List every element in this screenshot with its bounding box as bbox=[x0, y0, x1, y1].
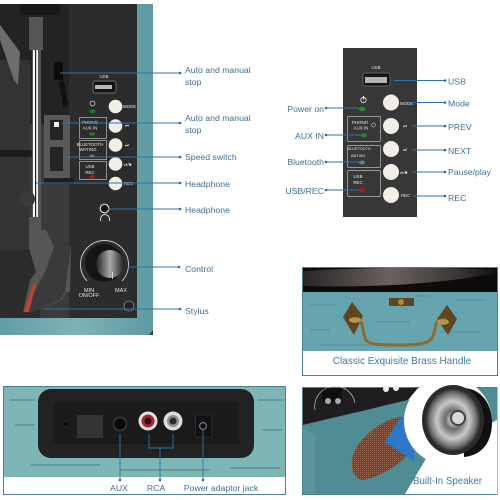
callout: Bluetooth: Bluetooth bbox=[287, 157, 324, 167]
buttons bbox=[383, 94, 413, 203]
callout: auto and manual stop 2 bbox=[62, 113, 251, 135]
callout: auto and manual stop 1: stop bbox=[185, 77, 202, 87]
AUX jack bbox=[114, 418, 126, 430]
buttons: REC bbox=[401, 193, 410, 198]
Bluetooth box: BLUETOOTH bbox=[347, 147, 371, 151]
USB/REC box: REC bbox=[353, 180, 363, 185]
power indicator bbox=[90, 101, 96, 114]
mode boxes bbox=[77, 118, 106, 180]
buttons: ⏭ bbox=[403, 147, 407, 152]
PHONO / AUX IN box: PHONO bbox=[352, 120, 369, 125]
panel: button panel diagram bbox=[343, 48, 417, 217]
USB port: USB bbox=[371, 65, 381, 70]
callout: power on: Power on bbox=[287, 104, 324, 114]
power icon and LED bbox=[358, 96, 366, 111]
buttons: ⏮ bbox=[403, 124, 407, 129]
buttons: ⏯/■ bbox=[400, 170, 408, 175]
callout: RCA bbox=[147, 434, 173, 493]
volume knob: MAX bbox=[115, 288, 127, 294]
control buttons: ⏮ bbox=[125, 124, 129, 128]
callout: speed switch: Speed switch bbox=[185, 152, 237, 162]
callout: RCA: RCA bbox=[147, 483, 165, 493]
callout: REC bbox=[412, 193, 466, 203]
callout: Pause/play bbox=[412, 167, 492, 177]
mode boxes: AUX IN bbox=[83, 126, 97, 130]
knobs bbox=[322, 388, 342, 402]
mode boxes: BLUETOOTH bbox=[77, 142, 103, 147]
vinyl record bbox=[303, 268, 497, 292]
callout: Mode bbox=[410, 98, 470, 108]
RCA red bbox=[138, 412, 158, 430]
control buttons: REC bbox=[124, 181, 133, 186]
callout: PREV bbox=[412, 122, 472, 132]
callout: REC: REC bbox=[448, 193, 466, 203]
callout: USB bbox=[394, 76, 466, 86]
callout: auto and manual stop 2: stop bbox=[185, 125, 202, 135]
mode boxes: PHONO bbox=[82, 120, 99, 125]
caption: Built-In Speaker bbox=[413, 476, 483, 487]
control buttons: ⏯/■ bbox=[124, 162, 132, 167]
callout: Pause/play: Pause/play bbox=[448, 167, 492, 177]
USB/REC box bbox=[348, 170, 380, 196]
RCA white bbox=[164, 412, 182, 430]
mode boxes: USB bbox=[85, 164, 95, 169]
callout: auto and manual stop 1: Auto and manual bbox=[185, 65, 251, 75]
cartridge bbox=[23, 230, 71, 312]
left face of case bbox=[303, 425, 315, 494]
volume knob: ON/OFF bbox=[79, 293, 100, 299]
stop lever bbox=[54, 62, 63, 80]
USB port bbox=[93, 74, 116, 93]
caption: Classic Exquisite Brass Handle bbox=[333, 356, 472, 367]
case top bbox=[303, 388, 418, 425]
callout: Bluetooth bbox=[287, 157, 359, 167]
speed switch plate bbox=[44, 115, 70, 178]
callout: AUX IN bbox=[295, 131, 361, 141]
callout: auto and manual stop 2: Auto and manual bbox=[185, 113, 251, 123]
callout: NEXT: NEXT bbox=[448, 146, 472, 156]
callout: USB/REC: USB/REC bbox=[285, 186, 324, 196]
magnified speaker circle bbox=[404, 377, 492, 465]
Bluetooth box bbox=[347, 146, 380, 168]
callout: headphone 1: Headphone bbox=[185, 179, 230, 189]
tonearm bbox=[32, 50, 41, 240]
callout: power on bbox=[287, 104, 359, 114]
callout: control bbox=[128, 264, 213, 274]
control buttons bbox=[109, 100, 136, 190]
PHONO / AUX IN box bbox=[348, 116, 380, 142]
callout: AUX: AUX bbox=[110, 483, 128, 493]
callout: AUX bbox=[110, 434, 128, 493]
USB port bbox=[363, 65, 390, 86]
panel: rear ports bbox=[4, 386, 286, 494]
callout: USB: USB bbox=[448, 76, 466, 86]
callout: auto and manual stop 1 bbox=[60, 65, 251, 87]
teal case edge bbox=[0, 4, 153, 335]
callout: power adaptor jack bbox=[184, 430, 259, 493]
callout: PREV: PREV bbox=[448, 122, 472, 132]
panel: built-in speaker bbox=[302, 377, 500, 495]
callout: power adaptor jack: Power adaptor jack bbox=[184, 483, 259, 493]
panel: turntable control close-up bbox=[0, 4, 153, 335]
control buttons: ⏭ bbox=[125, 142, 129, 148]
callout: Mode: Mode bbox=[448, 98, 470, 108]
callout: stylus: Stylus bbox=[185, 306, 209, 316]
panel: brass handle bbox=[302, 268, 498, 376]
PHONO / AUX IN box: AUX IN bbox=[354, 126, 368, 130]
callout: control: Control bbox=[185, 264, 213, 274]
control buttons: MODE bbox=[123, 104, 136, 109]
screw bbox=[124, 301, 134, 311]
brass handle bbox=[343, 298, 457, 345]
headphone jack bbox=[100, 204, 110, 221]
callout: headphone 2 bbox=[108, 205, 230, 215]
callout: AUX IN: AUX IN bbox=[295, 131, 324, 141]
case body bbox=[303, 388, 497, 494]
black port plate bbox=[38, 389, 254, 458]
mode boxes: REC bbox=[85, 170, 95, 175]
volume knob bbox=[79, 241, 128, 299]
mode boxes: WATING bbox=[79, 147, 97, 152]
Bluetooth box: WATING bbox=[351, 154, 365, 158]
speaker grille bbox=[352, 417, 408, 480]
callout: headphone 2: Headphone bbox=[185, 205, 230, 215]
callout: NEXT bbox=[412, 146, 472, 156]
power jack bbox=[196, 415, 212, 437]
USB port: USB bbox=[99, 74, 109, 79]
USB/REC box: USB bbox=[353, 174, 363, 179]
volume knob: MIN bbox=[84, 288, 94, 294]
buttons: MODE bbox=[400, 101, 413, 106]
callout: USB/REC bbox=[285, 186, 359, 196]
teal case bbox=[303, 292, 497, 351]
